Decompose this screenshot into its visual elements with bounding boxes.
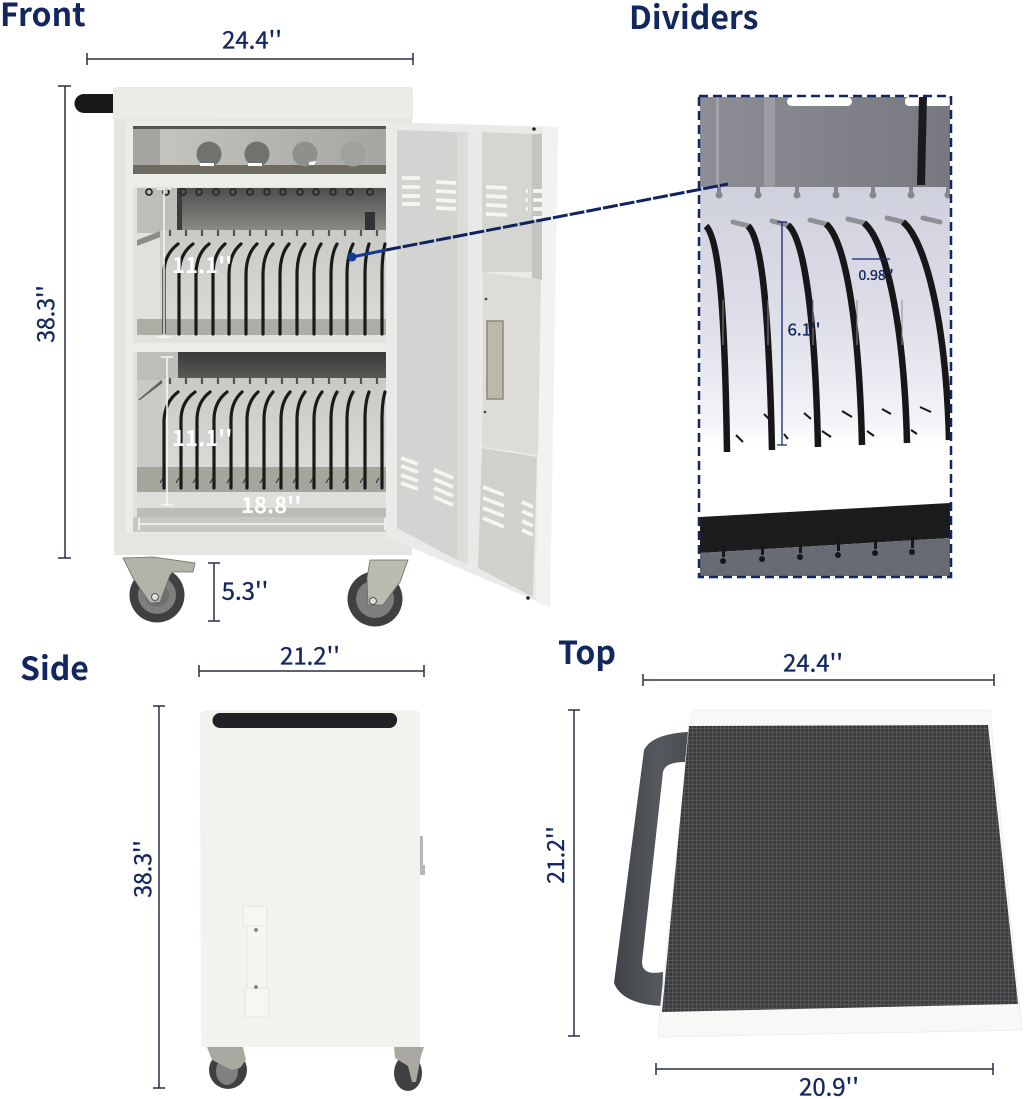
top width dimension: 24.4'': [783, 644, 843, 678]
open door: [387, 122, 558, 607]
side width dimension: [199, 636, 424, 677]
front height dimension: [27, 86, 71, 558]
top compartment with cable holes: [133, 126, 386, 174]
hook row: [146, 189, 373, 195]
rubber mat: [662, 725, 1018, 1012]
hanging notches: [716, 187, 952, 198]
cart body: [113, 87, 413, 555]
front white dimension lines: [139, 189, 385, 530]
left caster: [123, 557, 195, 622]
side wheels: [207, 1047, 424, 1091]
side view cart: [200, 710, 425, 1091]
right caster: [348, 560, 408, 626]
wheel height dimension: [208, 563, 268, 621]
white label: interior width: 18.8'': [241, 488, 301, 520]
panel: dividers close-up: [699, 96, 952, 577]
floor slots: [736, 407, 931, 442]
front view cart: [74, 87, 558, 626]
dashed panel border: [699, 96, 951, 577]
tube stubs: [733, 218, 940, 226]
top depth dimension: [537, 710, 580, 1036]
door handle recess: [487, 321, 503, 399]
side width dimension: 21.2'': [280, 636, 340, 672]
lower compartment: [133, 352, 386, 532]
upper compartment: [133, 187, 386, 343]
wheel height dimension: 5.3'': [222, 572, 268, 606]
top width dimension: [643, 644, 994, 686]
side handle: [212, 713, 397, 728]
top lower width dimension: [656, 1063, 993, 1099]
side bracket: [243, 906, 269, 1017]
heading: Top: Top: [558, 628, 616, 674]
front height dimension: 38.3'': [27, 285, 61, 343]
upper charging slot dividers: [164, 244, 385, 334]
side height dimension: [124, 706, 165, 1088]
side latch: [420, 836, 425, 875]
middle shelf: [133, 343, 386, 352]
lower notches: [720, 540, 915, 564]
top handle: [614, 732, 688, 1006]
lower charging slot dividers: [164, 392, 385, 488]
backdrop: [700, 97, 951, 577]
top view cart: [614, 710, 1022, 1037]
height dimension 6.1: 6.1'': [787, 316, 821, 340]
tube highlights: [723, 300, 902, 345]
door vents: [401, 178, 542, 535]
top plate: [658, 710, 1022, 1037]
top shelf: [133, 174, 386, 187]
floor slots: [160, 478, 379, 483]
divider tubes: [706, 222, 949, 452]
cart handle: [74, 94, 113, 113]
callout arrow from cart to dividers: [348, 184, 728, 262]
white label: lower compartment height: 11.1'': [172, 421, 232, 453]
front width dimension: 24.4'': [222, 20, 282, 56]
side height dimension: 38.3'': [124, 840, 158, 898]
door latch plate: [482, 272, 541, 455]
spacing dimension 0.98: 0.98'': [858, 265, 894, 285]
heading: Side: Side: [20, 644, 89, 690]
top depth dimension: 21.2'': [537, 826, 571, 884]
front width dimension: [87, 20, 413, 65]
white label: upper compartment height: 11.1'': [172, 248, 232, 280]
height dimension 6.1: [777, 222, 821, 445]
side body: [200, 710, 420, 1047]
spacing dimension 0.98: [852, 259, 894, 285]
